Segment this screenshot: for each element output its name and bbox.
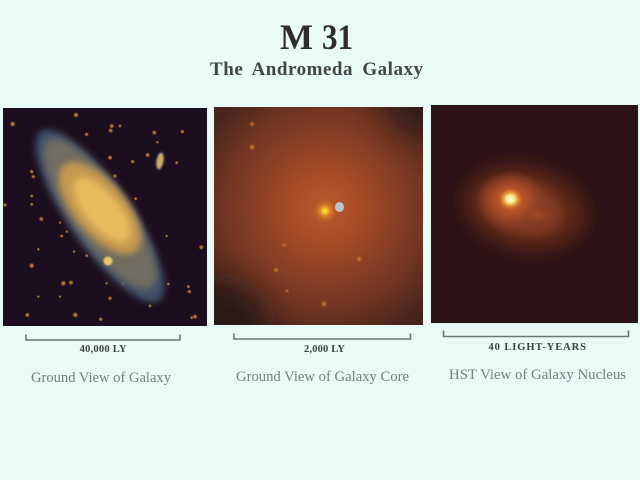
scale bar: 2,000 LY [234, 334, 410, 355]
scale bar: 40 light-years [444, 330, 628, 353]
scale bar: 40,000 LY [26, 334, 180, 355]
bright star near disk [104, 256, 112, 266]
panel: ground view of galaxy core [214, 107, 423, 325]
panel: HST view of galaxy nucleus [431, 105, 638, 323]
companion galaxy [155, 152, 165, 170]
panel: ground view of galaxy [3, 108, 207, 326]
label: 40,000 LY: 40,000 LY [80, 344, 127, 355]
title: 31 [322, 17, 353, 57]
nucleus glow [456, 154, 594, 262]
galaxy core [316, 202, 334, 220]
title: M [280, 17, 313, 57]
label: 40 LIGHT-YEARS: 40 LIGHT-YEARS [488, 342, 586, 353]
bright nucleus [500, 189, 522, 209]
stars [3, 112, 204, 322]
gray blob [335, 202, 344, 212]
subtitle: The Andromeda Galaxy [210, 59, 424, 80]
galaxy disk [32, 126, 169, 306]
caption: ground view of galaxy core: Ground View of Galaxy Core [236, 369, 409, 385]
dark corner shading [214, 107, 423, 325]
faint stars in the core field [250, 122, 361, 306]
caption: ground view of galaxy: Ground View of Galaxy [31, 370, 171, 386]
caption: HST view of galaxy nucleus: HST View of Galaxy Nucleus [449, 367, 626, 383]
title [280, 17, 353, 57]
label: 2,000 LY: 2,000 LY [304, 344, 345, 355]
